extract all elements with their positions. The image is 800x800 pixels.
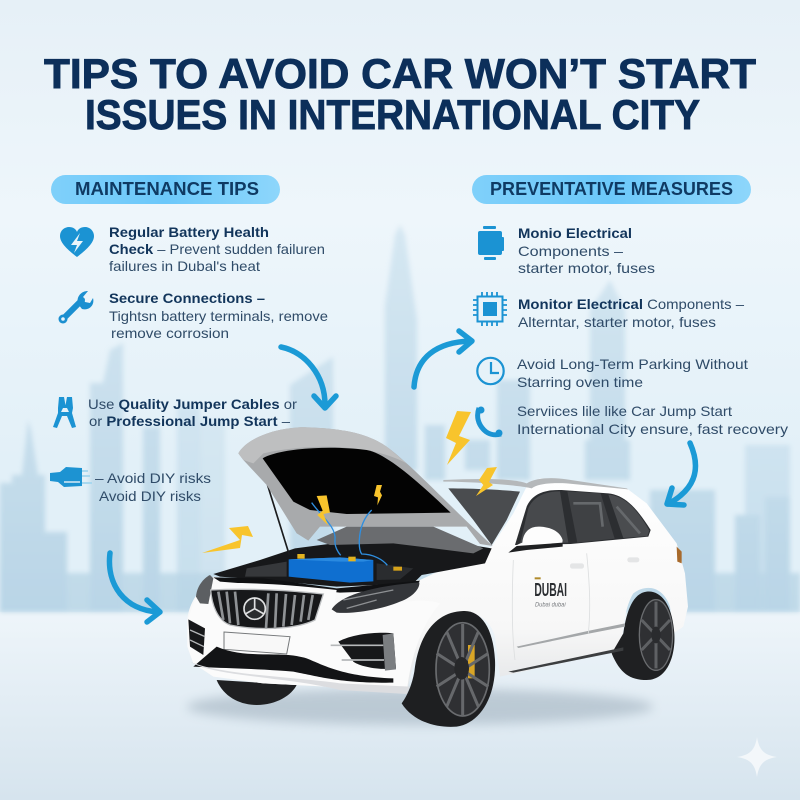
tip: monio electrical xyxy=(518,225,655,276)
grille xyxy=(211,589,323,628)
arrow: to car from services xyxy=(667,443,695,505)
icon: phone xyxy=(478,406,502,436)
door logo: DUBAI xyxy=(534,579,567,600)
roof rail xyxy=(443,478,628,489)
front wheel xyxy=(402,611,495,727)
heading pill: maintenance tips: MAINTENANCE TIPS xyxy=(75,179,259,199)
windows xyxy=(448,488,520,545)
tip: monitor electrical components xyxy=(518,296,744,330)
arrow: to front bumper xyxy=(109,553,160,622)
side mirror xyxy=(508,527,563,552)
tip: quality jumper cables xyxy=(88,396,297,429)
windscreen area under hood xyxy=(317,527,483,553)
title: TIPS TO AVOID CAR WON’T START xyxy=(44,50,756,97)
tip: monio electrical: starter motor, fuses xyxy=(518,260,655,276)
door details xyxy=(517,623,625,648)
tip: services: Serviices lile like Car Jump Start xyxy=(517,403,732,419)
tip: regular battery health: Regular Battery Health xyxy=(109,224,269,240)
sparkle watermark xyxy=(737,737,777,777)
heading pill: preventative measures: PREVENTATIVE MEASURES xyxy=(490,179,733,199)
tip: quality jumper cables: Use Quality Jumper Cables or xyxy=(88,396,297,412)
tip: regular battery health: failures in Dubal's heat xyxy=(109,258,260,274)
battery xyxy=(289,554,402,583)
tip: secure connections: remove corrosion xyxy=(111,325,229,341)
tip: long-term parking: Starring oven time xyxy=(517,374,643,390)
car body xyxy=(187,478,688,693)
tip: monio electrical: Components – xyxy=(518,243,623,259)
tip: avoid DIY risks: Avoid DIY risks xyxy=(99,488,201,504)
door logo: Dubai dubai xyxy=(535,603,566,609)
icon: cable connector xyxy=(50,467,92,487)
tip: services xyxy=(517,403,788,437)
tip: quality jumper cables: or Professional Jump Start – xyxy=(89,413,290,429)
tip: monio electrical: Monio Electrical xyxy=(518,225,632,241)
icon: wrench xyxy=(58,291,93,324)
tip: regular battery health: Check – Prevent sudden failuren xyxy=(109,241,325,257)
headlight left xyxy=(196,575,213,604)
arrow: to preventative tips xyxy=(414,331,472,387)
tip: monitor electrical components: Monitor Electrical Components – xyxy=(518,296,744,312)
tip: long-term parking: Avoid Long-Term Parking Without xyxy=(517,356,748,372)
tip: avoid DIY risks xyxy=(95,470,211,504)
tip: monitor electrical components: Alterntar, starter motor, fuses xyxy=(518,314,716,330)
lightning bolts xyxy=(202,411,471,553)
sparks in bay and on roof xyxy=(317,467,497,525)
lower grille xyxy=(193,647,393,683)
open hood xyxy=(238,427,493,546)
arrow: to car from left tips xyxy=(281,347,336,408)
tip: long-term parking xyxy=(517,356,748,390)
front left wheel xyxy=(217,680,297,705)
icon: starter motor xyxy=(478,226,504,260)
lower intakes xyxy=(188,619,205,655)
heading pill: maintenance tips xyxy=(51,175,280,204)
title xyxy=(44,50,756,138)
engine bay xyxy=(213,537,492,587)
tip: services: International City ensure, fast recovery xyxy=(517,421,788,437)
tip: secure connections xyxy=(109,290,328,341)
chin trim xyxy=(190,662,410,694)
tip: secure connections: Tightsn battery terminals, remove xyxy=(109,308,328,324)
heading pill: preventative measures xyxy=(472,175,751,204)
door logo xyxy=(534,577,567,609)
front fascia xyxy=(187,583,440,693)
icon: jumper clamp xyxy=(53,397,76,428)
jumper cables xyxy=(312,503,387,565)
white SUV with open hood xyxy=(187,427,688,727)
tip: avoid DIY risks: – Avoid DIY risks xyxy=(95,470,211,486)
tip: regular battery health xyxy=(109,224,325,274)
icon: clock xyxy=(477,358,504,384)
icon: heart with bolt xyxy=(60,227,94,257)
rear wheel xyxy=(612,592,674,680)
title: ISSUES IN INTERNATIONAL CITY xyxy=(85,91,700,138)
tip: secure connections: Secure Connections – xyxy=(109,290,265,306)
city skyline xyxy=(0,225,800,612)
licence plate xyxy=(224,632,290,654)
hood underside panel xyxy=(263,448,451,514)
hood strut xyxy=(266,480,289,555)
icon: chip xyxy=(473,292,507,326)
headlight right xyxy=(332,582,419,613)
